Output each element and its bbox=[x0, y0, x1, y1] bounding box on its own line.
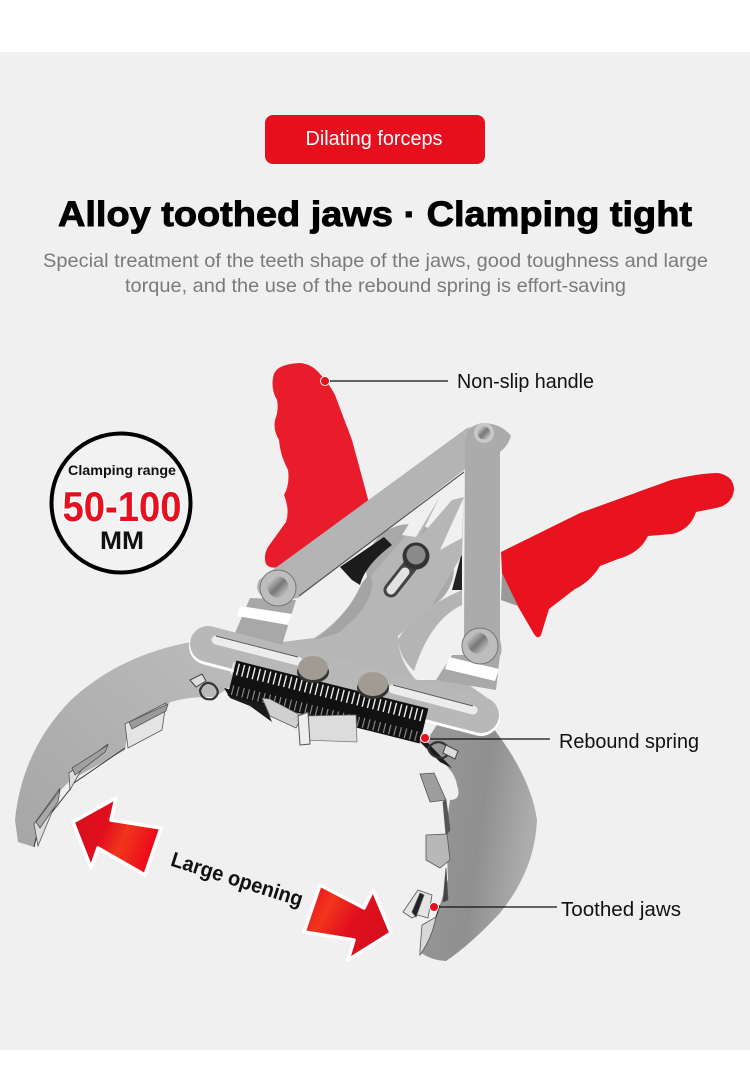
center pin and slot bbox=[391, 542, 430, 590]
spring shadow under coils bbox=[224, 688, 452, 768]
arrow: left opening arrow bbox=[73, 798, 161, 875]
clamping range badge: MM bbox=[100, 527, 144, 555]
clamping range badge bbox=[52, 434, 190, 572]
rear disc and dark shadows bbox=[366, 524, 454, 612]
callout: non-slip handle: Non-slip handle bbox=[457, 371, 594, 393]
diagonal link bar bbox=[257, 427, 484, 600]
clamping range badge: Clamping range bbox=[68, 462, 176, 478]
subtitle text bbox=[43, 250, 708, 297]
tool: piston ring pliers bbox=[15, 363, 734, 961]
spring bbox=[190, 668, 458, 759]
pill label: Dilating forceps bbox=[265, 115, 485, 164]
vertical link bar bbox=[462, 423, 511, 660]
spring clips bbox=[262, 698, 357, 745]
arrow: right opening arrow bbox=[304, 885, 391, 960]
left jaw teeth bbox=[34, 703, 168, 846]
link pivot pins bbox=[260, 423, 498, 664]
clamping range badge: 50-100 bbox=[62, 483, 182, 530]
callout: toothed jaws bbox=[430, 899, 681, 921]
slide plate with slots bbox=[208, 636, 481, 717]
left jaw bbox=[15, 642, 240, 847]
large opening label: Large opening bbox=[168, 848, 306, 911]
pill label: Dilating forceps: Dilating forceps bbox=[306, 128, 442, 150]
slide pins bbox=[297, 656, 389, 699]
lower link brackets bbox=[232, 598, 296, 645]
right jaw bbox=[420, 712, 537, 961]
central blade body bbox=[250, 492, 490, 720]
callout: rebound spring bbox=[420, 731, 699, 753]
callout: toothed jaws: Toothed jaws bbox=[561, 899, 681, 921]
right jaw teeth bbox=[403, 773, 450, 955]
callout: rebound spring: Rebound spring bbox=[559, 731, 699, 753]
title: Alloy toothed jaws · Clamping tight bbox=[58, 195, 692, 234]
subtitle text: torque, and the use of the rebound spring is effort-saving bbox=[125, 275, 626, 297]
left red handle bbox=[265, 363, 369, 568]
subtitle text: Special treatment of the teeth shape of the jaws, good toughness and large bbox=[43, 250, 708, 272]
callout: non-slip handle bbox=[320, 371, 594, 393]
right red handle bbox=[501, 473, 734, 637]
